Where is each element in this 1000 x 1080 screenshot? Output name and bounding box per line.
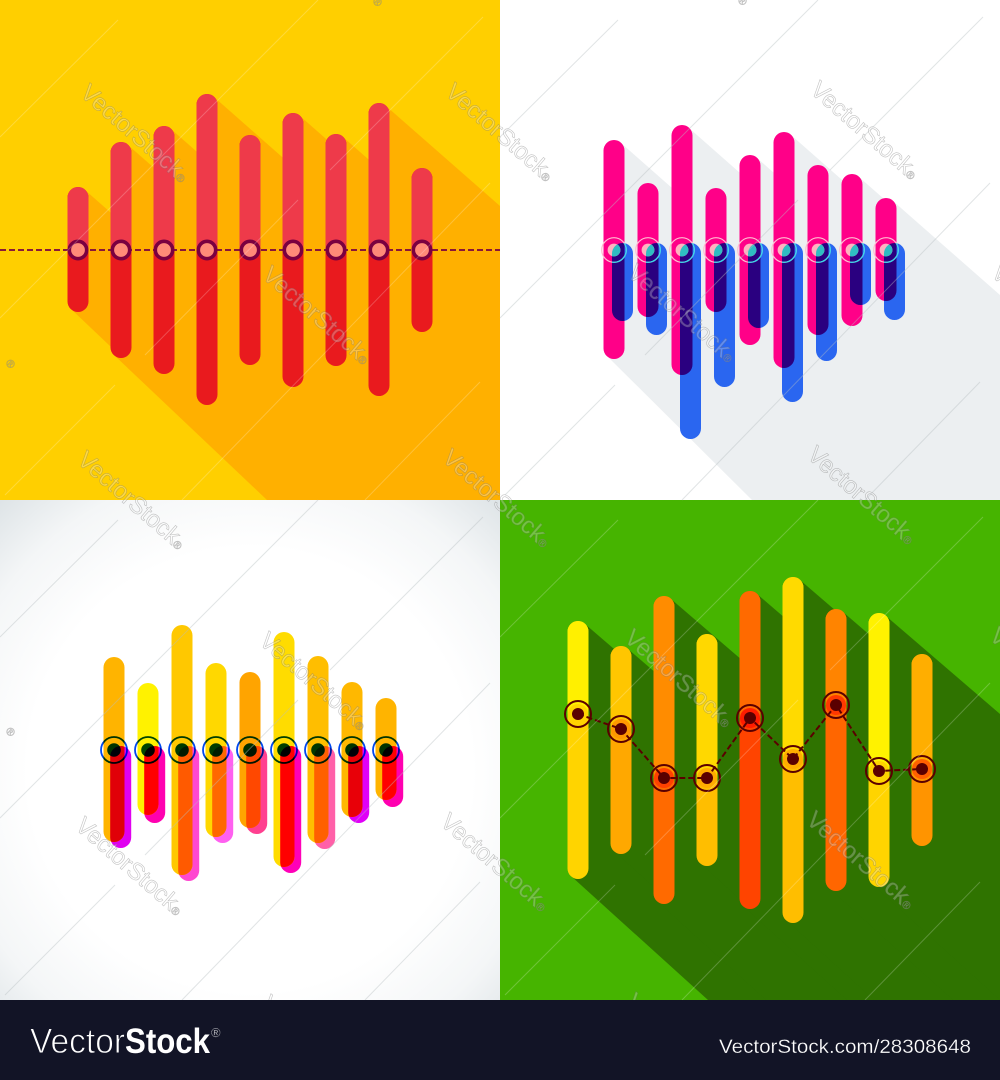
watermark text: VectorStock® [254,627,374,736]
chart markers [565,692,935,791]
magenta lower bars [110,746,403,881]
watermark text: VectorStock® [440,78,560,187]
ring markers [101,737,399,763]
two-tone bars [568,577,932,923]
watermark text: VectorStock® [437,444,557,553]
watermark text: VectorStock® [75,79,195,188]
panel: white with pink and blue bars [500,0,1000,500]
ring markers [602,238,898,262]
marker discs [568,695,932,788]
long shadow: grey [607,128,1000,500]
panel: white vignette with yellow and magenta bars [0,500,500,1000]
watermark text: ® [3,357,17,372]
footer image id: VectorStock.com/28308648 [719,1037,971,1058]
watermark text: ® [3,725,17,740]
watermark text: VectorStock® [805,76,925,185]
footer logo [30,1022,221,1061]
footer logo: Vector [30,1022,125,1061]
footer logo: ® [211,1025,221,1040]
red bars upper tone [68,94,432,249]
watermark text: VectorStock® [70,812,190,921]
yellow upper bars [104,625,396,875]
panel: green with orange bars and line chart [500,500,1000,1000]
long shadow: dark green [571,580,1000,1000]
watermark text: V [621,988,651,1019]
watermark text: VectorStock® [802,441,922,550]
red bars lower tone [68,94,432,405]
overlap regions [110,746,403,881]
watermark text: VectorStock® [435,808,555,917]
watermark text: VectorStock® [622,259,742,368]
long shadow: orange [71,97,500,500]
watermark text: VectorStock® [801,806,921,915]
watermark text: VectorStock® [257,261,377,370]
watermark text: VectorStock® [72,446,192,555]
watermark text: VectorStock® [619,624,739,733]
dashed axis line [0,249,500,251]
watermark text: V [256,990,286,1021]
dashed line chart [578,705,922,778]
axis markers [69,241,431,259]
panel: yellow with red bars [0,0,500,500]
footer logo: Stock [125,1022,210,1061]
footer bar [0,1000,1000,1080]
pink and blue overlapping bars [604,125,905,439]
